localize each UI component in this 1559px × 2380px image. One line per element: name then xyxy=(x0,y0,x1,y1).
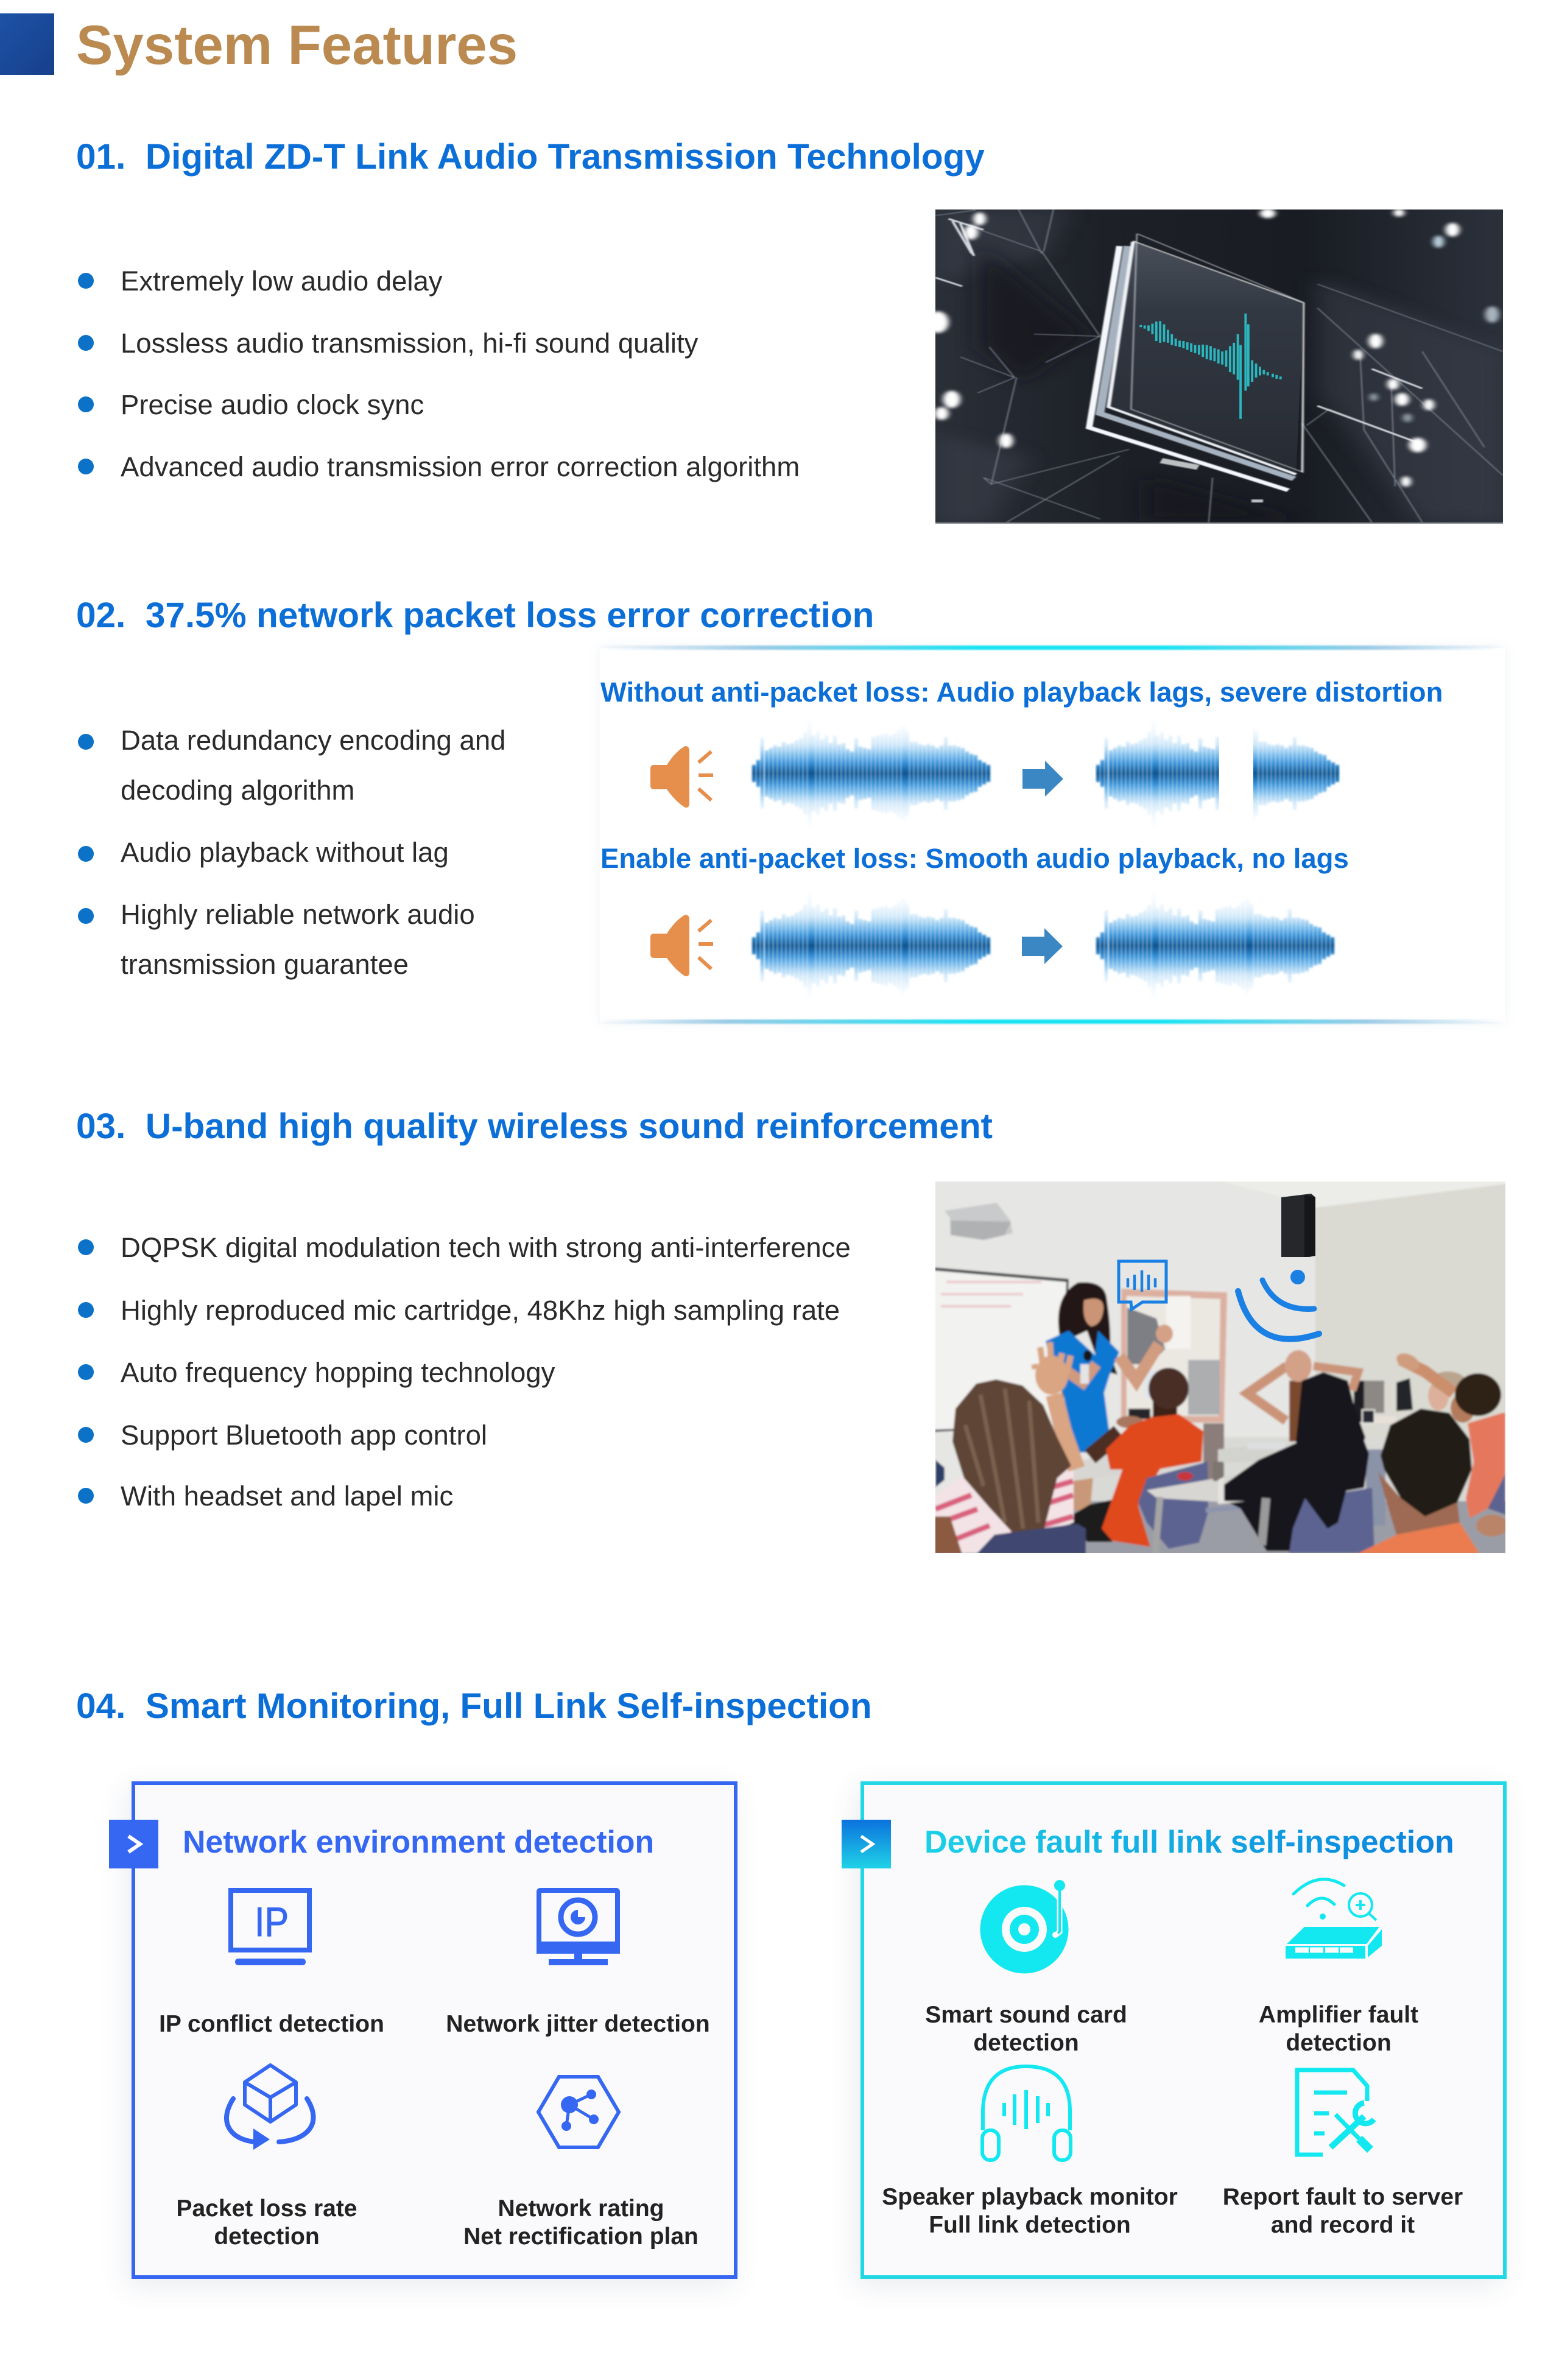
label: Network jitter detection: Network jitter detection xyxy=(446,2011,710,2037)
panel: device fault self-inspection xyxy=(860,1781,1507,2279)
network panel icons xyxy=(224,1888,621,2150)
row 1: lagging waveform part 1 xyxy=(1095,727,1219,820)
network panel title: Network environment detection xyxy=(183,1824,654,1859)
subheading: enable anti-packet loss: Enable anti-packet loss: Smooth audio playback, no lags xyxy=(600,843,1349,874)
bullet list 03 xyxy=(78,1232,851,1512)
front left student xyxy=(935,1460,945,1487)
teacher legs and small desk xyxy=(1072,1470,1094,1510)
bullet list 02: decoding algorithm xyxy=(121,775,354,806)
bullet list 01: Advanced audio transmission error correction algorithm xyxy=(121,451,800,482)
heading 01: 01. Digital ZD-T Link Audio Transmission Technology xyxy=(76,137,985,177)
teacher hair and dress xyxy=(1058,1283,1117,1375)
label: Packet loss rate detection: Packet loss rate detection xyxy=(176,2195,357,2250)
icon: sound card disc xyxy=(980,1880,1068,1973)
whiteboard xyxy=(926,1267,1069,1432)
row 1: arrow xyxy=(1022,761,1063,797)
icon: share network hexagon xyxy=(538,2077,619,2147)
icon: jitter monitor xyxy=(537,1890,620,1965)
wall speaker xyxy=(1281,1194,1315,1257)
label: Speaker playback monitor Full link detection: Speaker playback monitor Full link detection xyxy=(882,2184,1178,2238)
image: audio chip with waveform xyxy=(935,209,1503,524)
icon: rotating cube xyxy=(227,2065,314,2150)
panel: network environment detection xyxy=(132,1781,737,2279)
row 2: speaker xyxy=(650,915,713,976)
bullet list 03: DQPSK digital modulation tech with strong anti-interference xyxy=(121,1232,851,1263)
icon: IP monitor xyxy=(231,1890,309,1965)
bullet list 02: Data redundancy encoding and xyxy=(121,725,505,756)
bullet list 01: Precise audio clock sync xyxy=(121,389,424,420)
center chair and desk xyxy=(1138,1462,1208,1549)
subheading: without anti-packet loss: Without anti-packet loss: Audio playback lags, severe distortion xyxy=(600,677,1443,708)
device panel title: Device fault full link self-inspection xyxy=(924,1825,1454,1860)
heading 03: 03. U-band high quality wireless sound reinforcement xyxy=(76,1107,993,1146)
walls and ceiling xyxy=(926,1172,1516,1562)
heading 02: 02. 37.5% network packet loss error correction xyxy=(76,596,874,635)
bullet list 02: transmission guarantee xyxy=(121,949,409,980)
bullet list 03: Auto frequency hopping technology xyxy=(121,1357,555,1388)
row 2: smooth waveform xyxy=(1096,891,1334,1001)
hair-down student with arms raised xyxy=(1218,1442,1285,1463)
icon: IP monitor: IP xyxy=(255,1899,289,1945)
row 2: arrow xyxy=(1022,928,1063,964)
audio flow diagrams xyxy=(650,727,1340,993)
bullet list 01: Lossless audio transmission, hi-fi sound quality xyxy=(121,328,698,359)
bullet list 03: Support Bluetooth app control xyxy=(121,1420,487,1451)
label: IP conflict detection: IP conflict detection xyxy=(159,2011,384,2037)
title: System Features xyxy=(76,15,518,76)
waveform on chip xyxy=(1141,314,1281,419)
row 1: lagging waveform part 2 xyxy=(1253,728,1340,819)
bullet list 03: With headset and lapel mic xyxy=(121,1480,453,1512)
row 2: source waveform xyxy=(752,891,990,1001)
icon: amplifier with wifi and magnifier xyxy=(1286,1879,1382,1959)
center student xyxy=(1153,1401,1177,1419)
back chair xyxy=(1289,1488,1374,1553)
device panel icons xyxy=(980,1878,1382,2162)
label: Amplifier fault detection: Amplifier fault detection xyxy=(1259,2002,1418,2056)
front right student xyxy=(1378,1472,1460,1535)
bullet list 02: Highly reliable network audio xyxy=(121,899,475,930)
icon: report with tools xyxy=(1297,2070,1374,2155)
chip face xyxy=(1110,242,1304,476)
right student xyxy=(1451,1393,1475,1423)
pinboard xyxy=(1121,1289,1227,1423)
bullet list 01 xyxy=(78,266,800,482)
icon: headphones with audio bars xyxy=(982,2066,1071,2160)
label: Report fault to server and record it: Report fault to server and record it xyxy=(1223,2184,1463,2238)
bullet list 02 xyxy=(78,725,505,980)
tab icon: device panel chevron xyxy=(842,1820,891,1868)
bullet list 01: Extremely low audio delay xyxy=(121,266,443,297)
row 1: speaker xyxy=(650,746,713,808)
label: Smart sound card detection: Smart sound card detection xyxy=(925,2002,1127,2056)
title marker square xyxy=(0,13,54,75)
label: Network rating Net rectification plan: Network rating Net rectification plan xyxy=(463,2195,699,2250)
tab icon: network panel chevron xyxy=(109,1820,158,1868)
sound wave arcs xyxy=(1238,1270,1319,1339)
heading 04: 04. Smart Monitoring, Full Link Self-inspection xyxy=(76,1686,872,1726)
speech bubble audio icon xyxy=(1119,1261,1166,1309)
projector xyxy=(945,1203,1013,1240)
bullet list 02: Audio playback without lag xyxy=(121,837,449,868)
image: classroom with teacher, students and wall speaker xyxy=(935,1181,1505,1553)
panel: packet loss comparison xyxy=(601,644,1501,1025)
computers and people behind xyxy=(1356,1381,1384,1413)
row 1: source waveform xyxy=(752,719,990,828)
bullet list 03: Highly reproduced mic cartridge, 48Khz high sampling rate xyxy=(121,1295,840,1326)
cabinet and floor xyxy=(1203,1423,1224,1484)
